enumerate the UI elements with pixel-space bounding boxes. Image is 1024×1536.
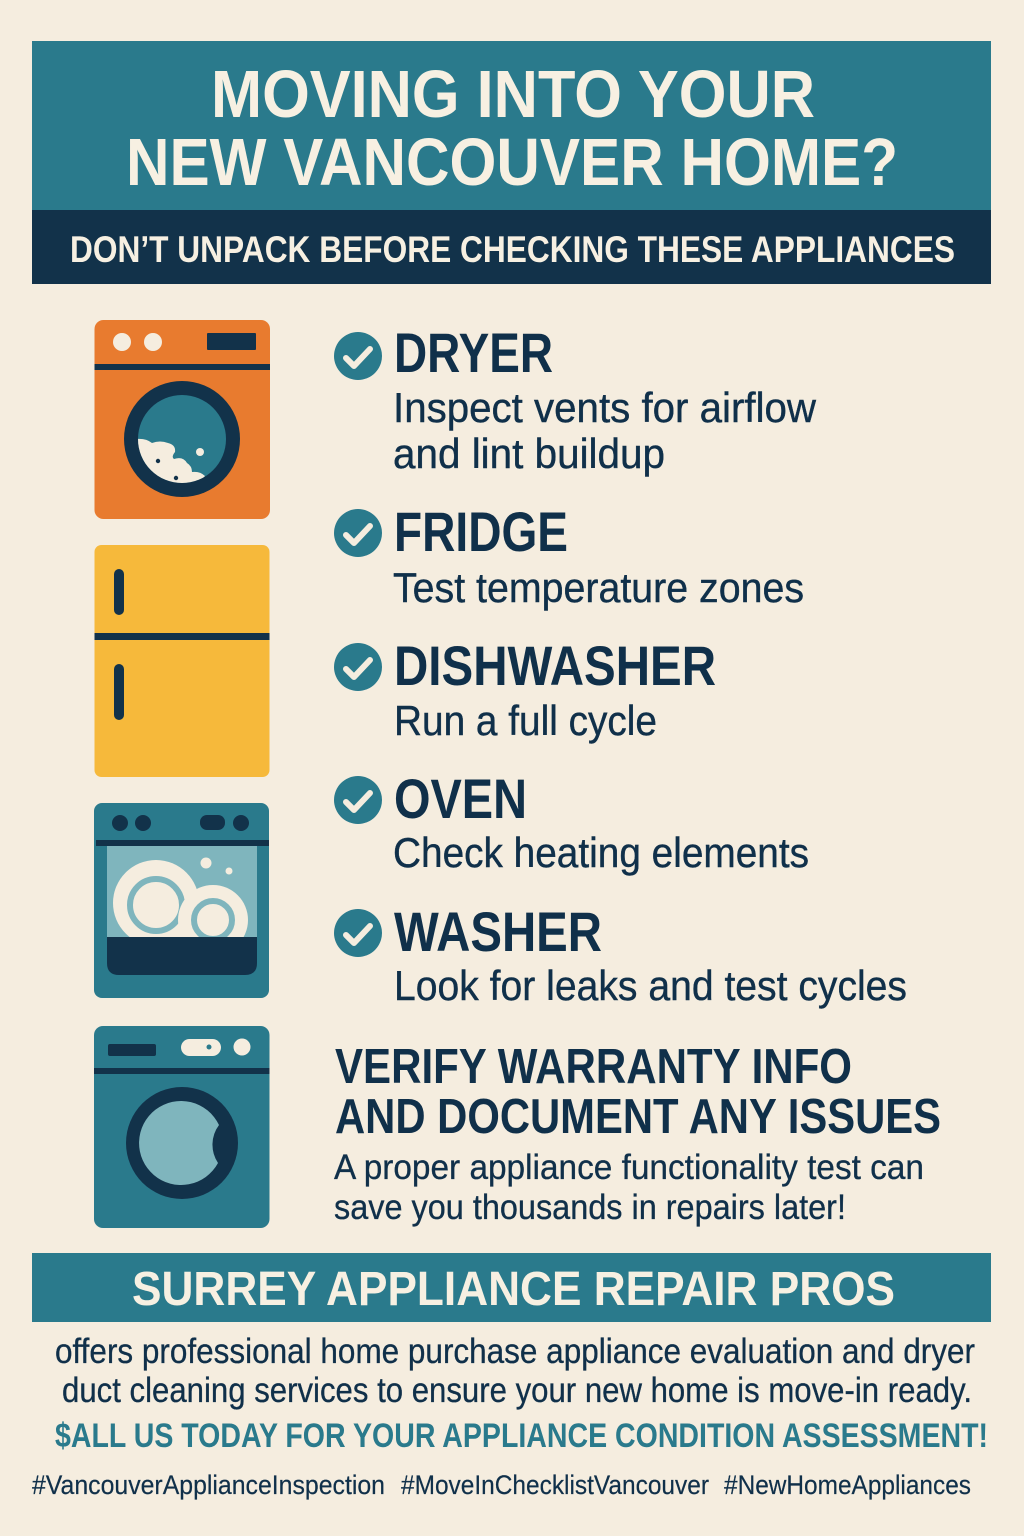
company description [55,1332,975,1410]
warranty callout: VERIFY WARRANTY INFO [335,1040,852,1094]
check icon [334,643,382,691]
checklist item: dryer [334,321,817,477]
check icon [334,509,382,557]
warranty callout: A proper appliance functionality test can [334,1148,924,1187]
checklist item: fridge: Test temperature zones [393,564,804,611]
checklist item: dishwasher [334,634,716,744]
checklist item: oven: Check heating elements [393,829,809,876]
warranty callout: save you thousands in repairs later! [334,1188,846,1227]
hashtags [32,1470,971,1500]
checklist item: fridge: FRIDGE [394,500,568,563]
company banner [32,1253,991,1322]
company banner: SURREY APPLIANCE REPAIR PROS [132,1263,895,1316]
checklist item: washer: Look for leaks and test cycles [394,962,907,1009]
header panel [32,41,991,210]
checklist item: dryer: Inspect vents for airflow [393,384,817,431]
checklist item: oven: OVEN [394,767,527,830]
title: NEW VANCOUVER HOME? [126,125,898,200]
check icon [334,909,382,957]
check icon [334,776,382,824]
title: MOVING INTO YOUR [211,57,815,132]
checklist item: dryer: DRYER [394,321,553,384]
icon: dryer [94,320,270,519]
hashtags: #MoveInChecklistVancouver [401,1470,709,1500]
checklist item: washer: WASHER [394,900,602,963]
hashtags: #NewHomeAppliances [724,1470,971,1500]
icon: fridge [94,545,270,777]
title [126,57,898,200]
checklist item: dishwasher: Run a full cycle [394,697,657,744]
checklist item: dryer: and lint buildup [393,430,665,477]
icon: washer [94,1026,270,1228]
checklist item: oven [334,767,809,876]
checklist item: washer [334,900,907,1009]
subtitle banner [32,210,991,284]
check icon [334,332,382,380]
icon: dishwasher [94,803,269,998]
warranty callout [334,1040,941,1227]
hashtags: #VancouverApplianceInspection [32,1470,385,1500]
checklist item: dishwasher: DISHWASHER [394,634,716,697]
checklist item: fridge [334,500,804,611]
